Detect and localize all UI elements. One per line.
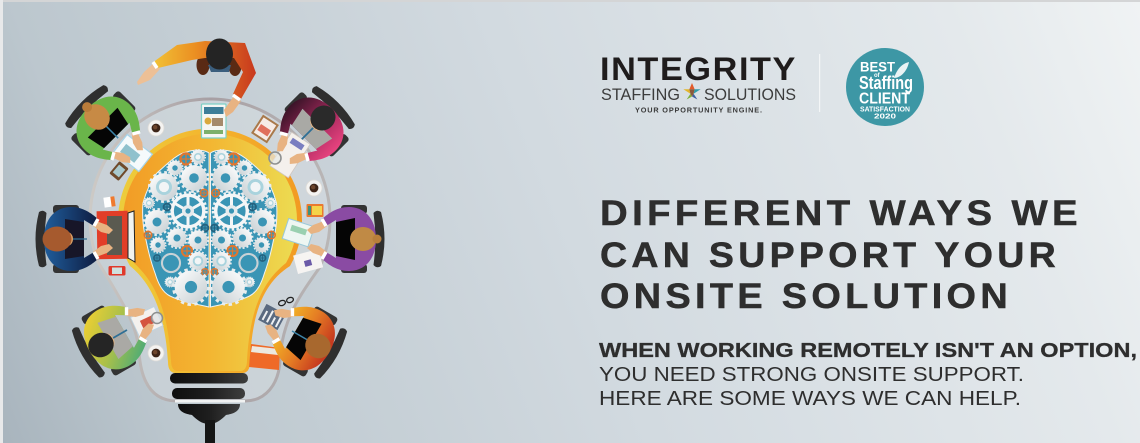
- vest: [88, 108, 131, 151]
- laptop screen: [128, 211, 135, 262]
- chair: [283, 79, 362, 158]
- brain of gears: [143, 150, 277, 307]
- jacket: [322, 207, 376, 271]
- head: [79, 99, 115, 135]
- book pages: [251, 346, 279, 355]
- left hemisphere: [143, 150, 209, 307]
- screw band two: [172, 388, 245, 399]
- chair: [36, 205, 79, 273]
- cup body: [103, 197, 113, 208]
- vest: [336, 218, 355, 260]
- chair: [341, 205, 384, 273]
- left sleeve shadow: [196, 55, 210, 75]
- year: 2020: [874, 112, 896, 120]
- phone body: [109, 161, 129, 181]
- person: magenta jacket: [259, 79, 362, 182]
- phone screen: [112, 268, 122, 274]
- right hand: [224, 96, 241, 117]
- shirt: [336, 213, 367, 265]
- coffee cup top left: [148, 120, 164, 136]
- orange book: [249, 344, 280, 370]
- bulb base: [170, 373, 248, 443]
- title: [600, 194, 1082, 316]
- right cuff: [233, 95, 240, 100]
- hands: [307, 219, 327, 259]
- tagline: YOUR OPPORTUNITY ENGINE.: [635, 106, 762, 114]
- tablet panel: [212, 118, 223, 126]
- illustration: meeting around light bulb: [36, 38, 384, 443]
- head: [301, 329, 335, 363]
- star centre: [689, 89, 695, 96]
- laptop: [97, 211, 135, 262]
- tie: [103, 123, 118, 138]
- hands: [269, 129, 312, 172]
- chair: [282, 306, 354, 386]
- tie: [65, 238, 87, 240]
- cup with orange label: [103, 196, 116, 208]
- hand pointing: [137, 62, 160, 85]
- neck: [61, 232, 73, 246]
- red chart: [140, 315, 155, 328]
- feather: [894, 62, 909, 78]
- solutions: SOLUTIONS: [704, 86, 796, 104]
- hands: [260, 301, 297, 345]
- map document: [282, 218, 314, 247]
- star left: [683, 89, 690, 94]
- red phone: [108, 266, 126, 276]
- award badge: [846, 48, 924, 126]
- tablet header: [204, 107, 224, 114]
- calculator keys: [312, 206, 322, 215]
- power cord: [205, 420, 215, 443]
- hands: [122, 300, 159, 344]
- tie: [108, 330, 127, 341]
- yellow person document: [131, 307, 163, 337]
- title line 1: DIFFERENT WAYS WE: [600, 194, 1082, 233]
- page: [131, 307, 163, 337]
- chart: [304, 259, 312, 267]
- person: blue jacket with laptop: [36, 205, 113, 273]
- calculator display: [308, 206, 311, 215]
- head: [42, 226, 72, 252]
- tie: [292, 331, 311, 342]
- line two: YOU NEED STRONG ONSITE SUPPORT.: [599, 364, 1024, 386]
- star icon: [683, 83, 701, 99]
- chair: [65, 305, 137, 385]
- vest: [65, 219, 84, 259]
- star lower right: [692, 94, 697, 99]
- badge circle: [846, 48, 924, 126]
- page: [270, 132, 310, 178]
- coffee cup right: [306, 180, 322, 196]
- left edge: [0, 0, 3, 443]
- jacket: [44, 207, 98, 271]
- phone body: [108, 266, 126, 276]
- tie: [302, 124, 317, 139]
- tablet frame: [202, 104, 226, 138]
- lenses: [278, 299, 286, 307]
- blue stripe: [290, 138, 305, 150]
- green person tablet: [114, 134, 152, 172]
- client: CLIENT: [859, 90, 910, 108]
- logo divider: [819, 54, 820, 112]
- right hemisphere: [210, 150, 277, 307]
- person: standing leader: [137, 38, 256, 117]
- head: [84, 328, 118, 362]
- light bulb: [118, 129, 302, 443]
- vest: [284, 314, 322, 360]
- subheading text: [599, 340, 1137, 410]
- content: [290, 225, 307, 235]
- right sleeve shadow: [228, 56, 242, 76]
- report under magenta person: [270, 132, 310, 178]
- sheet: [114, 134, 152, 172]
- book cover: [249, 344, 280, 370]
- magnifier: [269, 152, 281, 164]
- bulb glass: [118, 129, 302, 373]
- vest: [289, 109, 332, 152]
- hair bun: [80, 100, 94, 114]
- shirt: [85, 309, 137, 370]
- jacket: [65, 85, 149, 169]
- bars: [263, 308, 282, 327]
- glasses: [208, 65, 231, 72]
- vest: [97, 313, 135, 359]
- hands: [108, 128, 151, 171]
- tablet footer: [204, 130, 223, 134]
- title line 2: CAN SUPPORT YOUR: [600, 236, 1060, 275]
- satisfaction: SATISFACTION: [860, 104, 910, 114]
- collar: [95, 330, 118, 354]
- star top: [689, 83, 695, 89]
- screw band one: [170, 373, 248, 384]
- collar: [307, 110, 331, 134]
- line three: HERE ARE SOME WAYS WE CAN HELP.: [599, 388, 1021, 410]
- bold line: WHEN WORKING REMOTELY ISN'T AN OPTION,: [599, 340, 1137, 362]
- star right: [694, 89, 701, 94]
- staffing: STAFFING: [601, 86, 680, 104]
- shirt: [286, 97, 344, 155]
- star lower left: [687, 94, 692, 99]
- magnifier two: [152, 312, 162, 324]
- jacket: [74, 297, 153, 379]
- title line 3: ONSITE SOLUTION: [600, 277, 1012, 316]
- jacket: [266, 298, 345, 380]
- person: purple jacket: [307, 205, 384, 273]
- pad bars: [257, 124, 271, 136]
- head: [206, 38, 233, 70]
- calculator: [306, 204, 324, 217]
- person: yellow green jacket: [65, 288, 166, 385]
- lens two: [286, 296, 294, 304]
- jacket: [271, 86, 355, 170]
- wordmark: INTEGRITY: [600, 51, 797, 87]
- person: green jacket: [58, 78, 161, 181]
- best: BEST: [860, 58, 895, 74]
- tablet chart: [204, 118, 212, 124]
- base dome: [178, 404, 240, 424]
- chart: [120, 144, 140, 163]
- white report: [293, 249, 323, 274]
- notepad: [251, 115, 279, 143]
- calculator body: [306, 204, 324, 217]
- phone screen: [113, 165, 125, 177]
- person: orange jacket: [253, 289, 354, 386]
- center tablet: [202, 104, 226, 138]
- coffee cup bottom left: [148, 345, 164, 361]
- pad frame: [251, 115, 279, 143]
- shirt: [282, 310, 334, 371]
- table items: [97, 104, 323, 370]
- base highlight: [175, 400, 245, 402]
- top edge: [0, 0, 1140, 2]
- shirt: [76, 96, 134, 154]
- staffing: Staffing: [859, 72, 913, 93]
- sheet: [258, 304, 286, 330]
- grey bar chart sheet: [258, 304, 286, 330]
- pad page: [254, 117, 276, 141]
- page: [282, 218, 314, 247]
- of: of: [874, 73, 881, 79]
- bulb inner: [123, 134, 297, 371]
- hands: [93, 219, 113, 259]
- keyboard: [107, 216, 122, 255]
- laptop base: [97, 211, 128, 259]
- head: [350, 227, 376, 251]
- cup label: [110, 196, 116, 207]
- table ring: [90, 99, 330, 401]
- jacket: [152, 41, 256, 99]
- shirt: [53, 213, 84, 265]
- phone: [109, 161, 129, 181]
- chair: [58, 78, 137, 157]
- logo: Integrity Staffing Solutions: [600, 51, 797, 114]
- head: [305, 100, 341, 136]
- hair bun: [372, 234, 382, 244]
- left cuff: [153, 62, 157, 68]
- page: [293, 249, 323, 274]
- eyeglasses: [278, 296, 294, 307]
